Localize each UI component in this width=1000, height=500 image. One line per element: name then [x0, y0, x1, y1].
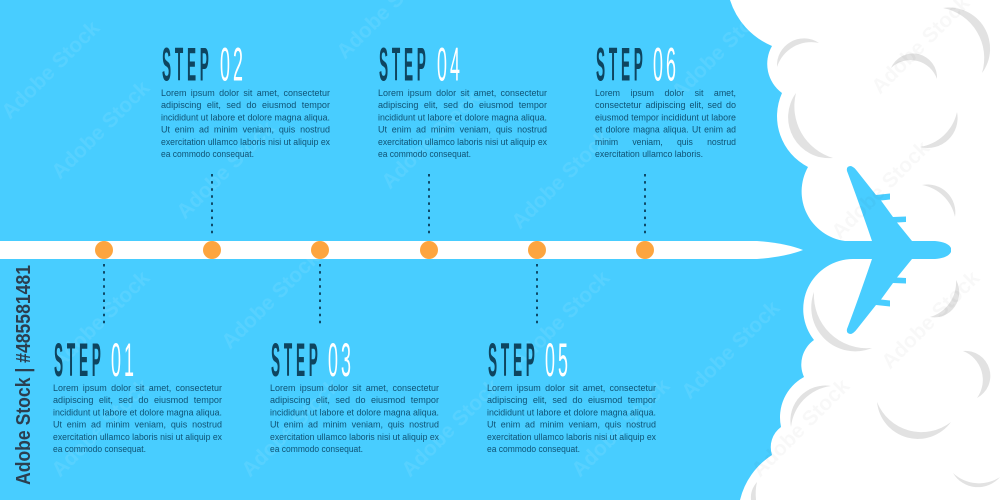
watermark: Adobe Stock [397, 374, 505, 482]
step 02 text: exercitation ullamco laboris nisi ut aliquip ex [161, 137, 331, 147]
step 04 [378, 38, 548, 159]
step 03 [270, 334, 440, 454]
watermark: Adobe Stock [47, 76, 155, 184]
step 05 text [487, 383, 657, 454]
step 01 heading: STEP [54, 335, 105, 387]
step 04 text: ea commodo consequat. [378, 149, 471, 159]
stock image id: Adobe Stock | #485581481 [13, 265, 35, 485]
step 02 text: ea commodo consequat. [161, 149, 254, 159]
step 01 text: Lorem ipsum dolor sit amet, consectetur [53, 383, 222, 393]
step 06 text: exercitation ullamco laboris. [595, 149, 703, 159]
watermark: Adobe Stock [0, 16, 105, 124]
step 04 heading: STEP [379, 40, 430, 91]
step 02 text [161, 88, 331, 159]
step 05 text: incididunt ut labore et dolore magna aliqua. [487, 407, 656, 417]
step 02 heading: 02 [220, 38, 246, 91]
step 01 text [53, 383, 223, 454]
flight path band [0, 241, 803, 259]
step 06 text: eiusmod tempor incididunt ut labore [595, 112, 736, 122]
step 05 text: exercitation ullamco laboris nisi ut aliquip ex [487, 432, 657, 442]
watermark: Adobe Stock [827, 136, 935, 244]
step 03 text: incididunt ut labore et dolore magna aliqua. [270, 407, 439, 417]
step 03 text: ea commodo consequat. [270, 444, 363, 454]
step 03 heading: STEP [271, 335, 322, 387]
cloud shading crescents [751, 8, 1000, 500]
step 05 text: adipiscing elit, sed do eiusmod tempor [487, 395, 656, 405]
step 01 text: ea commodo consequat. [53, 444, 146, 454]
dotted connectors [104, 174, 645, 326]
step 05 heading [488, 334, 571, 387]
step 04 heading: 04 [437, 38, 463, 91]
step 03 text: Ut enim ad minim veniam, quis nostrud [270, 420, 439, 430]
step 03 text: exercitation ullamco laboris nisi ut aliquip ex [270, 432, 440, 442]
watermark: Adobe Stock [377, 86, 485, 194]
watermark: Adobe Stock [237, 374, 345, 482]
step 06 text: minim veniam, quis nostrud [595, 137, 736, 147]
step 04 text: incididunt ut labore et dolore magna aliqua. [378, 112, 547, 122]
watermark: Adobe Stock [747, 374, 855, 482]
step 06 text: Lorem ipsum dolor sit amet, [595, 88, 736, 98]
step 02 [161, 38, 331, 159]
step 06 text: consectetur adipiscing elit, sed do [595, 100, 736, 110]
step 06 heading: 06 [653, 38, 679, 91]
airplane [800, 166, 951, 334]
step 05 [487, 334, 657, 454]
watermark: Adobe Stock [567, 374, 675, 482]
timeline markers [95, 241, 654, 259]
step 06 heading [596, 38, 679, 91]
cloud bank [730, 0, 1000, 500]
step 06 text [595, 88, 736, 159]
step 05 text: Ut enim ad minim veniam, quis nostrud [487, 420, 656, 430]
step 01 [53, 334, 223, 454]
step 01 heading: 01 [111, 334, 137, 387]
watermark: Adobe Stock [507, 126, 615, 234]
step 05 heading: 05 [545, 334, 571, 387]
step 03 text: adipiscing elit, sed do eiusmod tempor [270, 395, 439, 405]
step 05 text: Lorem ipsum dolor sit amet, consectetur [487, 383, 656, 393]
step 02 text: Lorem ipsum dolor sit amet, consectetur [161, 88, 330, 98]
step 03 heading: 03 [328, 334, 354, 387]
step 06 heading: STEP [596, 40, 647, 91]
step 04 text: Lorem ipsum dolor sit amet, consectetur [378, 88, 547, 98]
watermark: Adobe Stock [47, 374, 155, 482]
step 05 heading: STEP [488, 335, 539, 387]
watermark: Adobe Stock [217, 246, 325, 354]
step 01 text: adipiscing elit, sed do eiusmod tempor [53, 395, 222, 405]
step 02 heading [162, 38, 246, 91]
watermark: Adobe Stock [877, 266, 985, 374]
step 02 heading: STEP [162, 40, 213, 91]
step 06 [595, 38, 736, 159]
step 02 text: adipiscing elit, sed do eiusmod tempor [161, 100, 330, 110]
step 04 text: adipiscing elit, sed do eiusmod tempor [378, 100, 547, 110]
step 03 text: Lorem ipsum dolor sit amet, consectetur [270, 383, 439, 393]
step 04 text: exercitation ullamco laboris nisi ut aliquip ex [378, 137, 548, 147]
step 01 text: Ut enim ad minim veniam, quis nostrud [53, 420, 222, 430]
step 02 text: incididunt ut labore et dolore magna aliqua. [161, 112, 330, 122]
step 01 text: exercitation ullamco laboris nisi ut aliquip ex [53, 432, 223, 442]
step 04 text [378, 88, 548, 159]
watermark: Adobe Stock [677, 296, 785, 404]
step 03 text [270, 383, 440, 454]
step 02 text: Ut enim ad minim veniam, quis nostrud [161, 125, 330, 135]
step 04 heading [379, 38, 463, 91]
watermark: Adobe Stock [507, 266, 615, 374]
watermark: Adobe Stock [47, 266, 155, 374]
step 04 text: Ut enim ad minim veniam, quis nostrud [378, 125, 547, 135]
step 05 text: ea commodo consequat. [487, 444, 580, 454]
watermark: Adobe Stock [172, 116, 280, 224]
step 01 text: incididunt ut labore et dolore magna aliqua. [53, 407, 222, 417]
step 01 heading [54, 334, 137, 387]
step 06 text: et dolore magna aliqua. Ut enim ad [595, 125, 736, 135]
step 03 heading [271, 334, 354, 387]
